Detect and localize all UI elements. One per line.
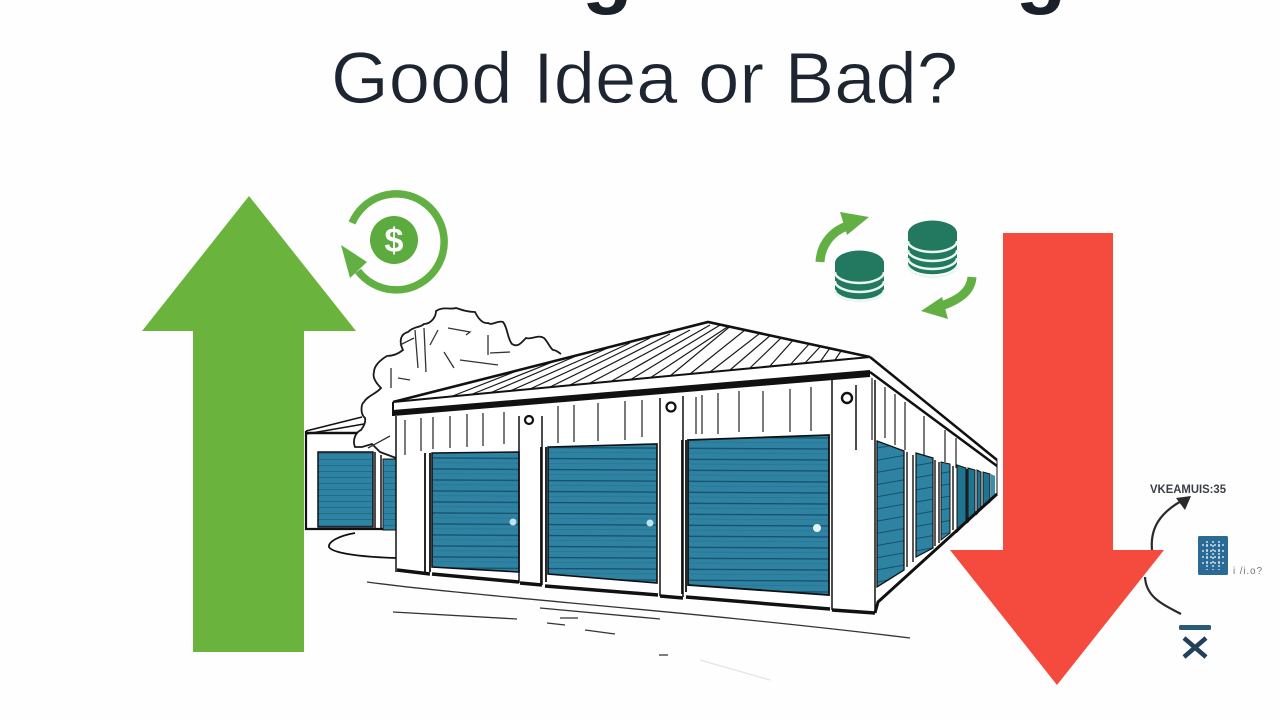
side wall posts [907, 452, 967, 567]
arrow: exchange up [820, 212, 869, 262]
door 1 [432, 452, 519, 572]
icon: office building [1198, 536, 1228, 575]
door frames and thresholds [425, 440, 686, 594]
coin stack right [908, 220, 957, 277]
door 3 [688, 435, 829, 595]
main storage building [393, 310, 997, 613]
annotation: curved arrow up [1152, 496, 1191, 550]
annotation: curved line down [1145, 577, 1181, 614]
green up arrow [142, 196, 356, 652]
side fascia [870, 357, 997, 494]
faint pavement mark [700, 660, 770, 680]
back storage building [306, 417, 396, 530]
driveway lines [367, 582, 910, 655]
icon: coin stacks with exchange arrows [820, 212, 972, 319]
subtitle: Good Idea or Bad? [331, 39, 958, 119]
tree outline [354, 308, 561, 458]
pavement curb [329, 533, 396, 558]
siding lines [405, 378, 956, 468]
annotation: small label: i /i.o? [1233, 566, 1262, 577]
tree branch details [368, 328, 510, 448]
door handles [510, 518, 821, 532]
door 2 [548, 444, 657, 583]
side wall doors [877, 441, 995, 587]
red down arrow [950, 233, 1164, 685]
icon: dash and cross [1179, 625, 1211, 657]
wall outlines and posts [396, 380, 875, 612]
annotation: label: VKEAMUIS:35 [1150, 484, 1227, 496]
front fascia [393, 357, 870, 416]
side wall base line [875, 494, 997, 613]
arrow: exchange down [921, 277, 972, 319]
side wall [870, 376, 997, 612]
post lights [525, 393, 852, 424]
roof [392, 320, 870, 402]
icon: dollar cycle: $ [385, 222, 404, 260]
front wall [396, 376, 875, 612]
bottom base lines [397, 570, 875, 613]
icon: dollar cycle [341, 194, 444, 290]
coin stack left [835, 250, 884, 301]
